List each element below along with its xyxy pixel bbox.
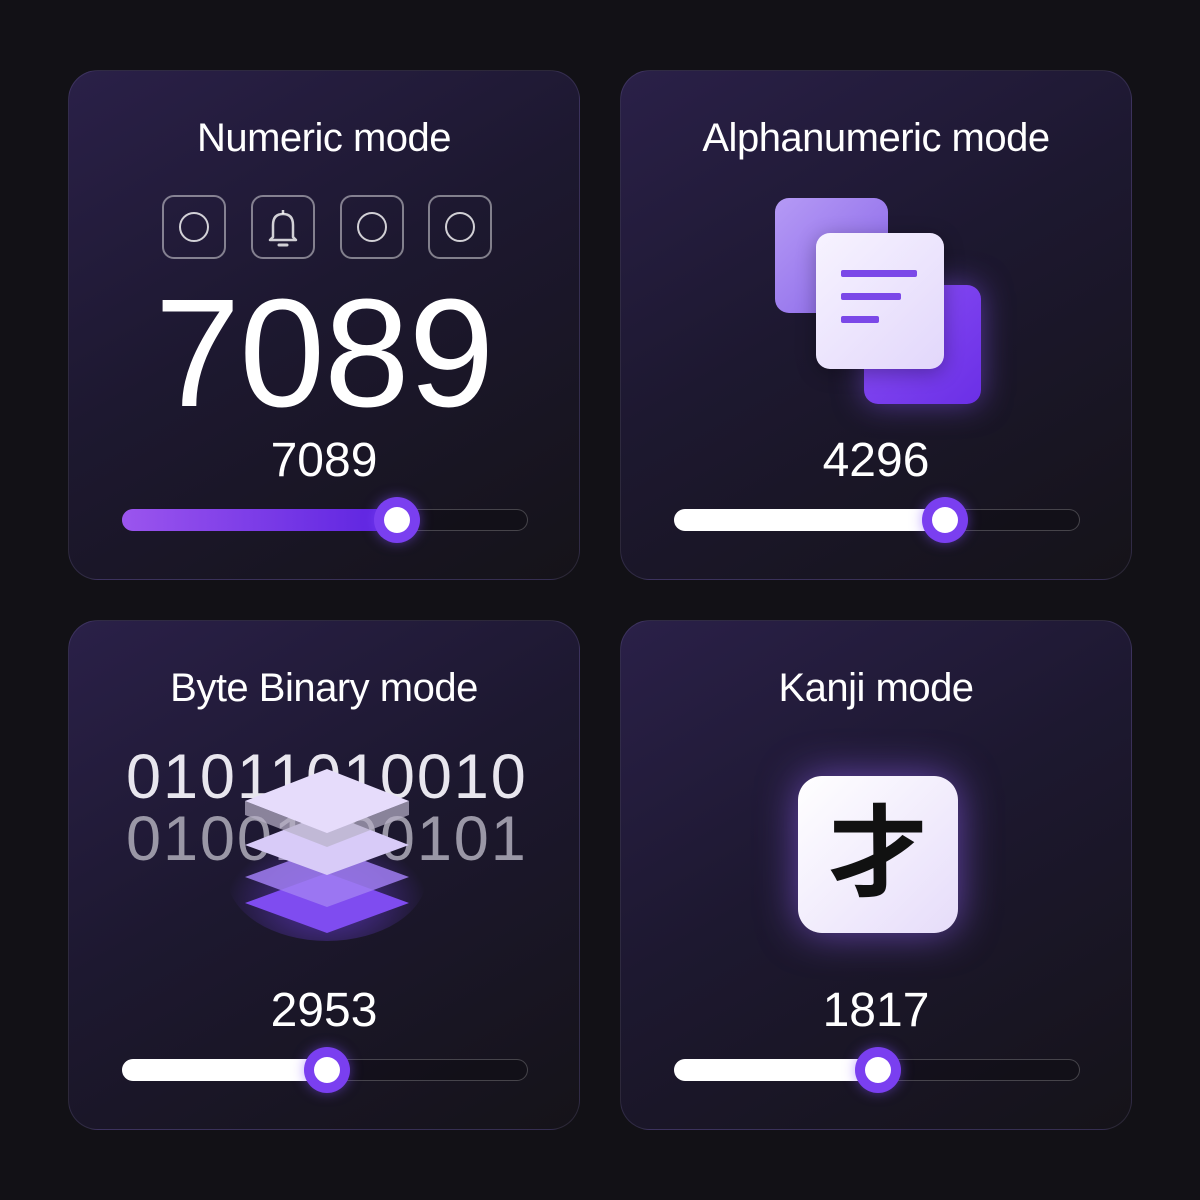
- value label: 7089: [271, 434, 377, 487]
- panel: byte binary mode: [68, 620, 580, 1130]
- value label: 1817: [823, 984, 929, 1037]
- title: byte binary mode: Byte Binary mode: [170, 666, 478, 710]
- panel: numeric mode: [68, 70, 580, 580]
- icon: documents: [775, 198, 1001, 424]
- icon: circle 3: [428, 195, 492, 259]
- icon: bell: [251, 195, 315, 259]
- slider: [674, 1059, 1080, 1081]
- slider: [122, 509, 528, 531]
- icon: kanji tile: 才: [828, 798, 928, 910]
- binary text: 01011010010: [126, 742, 528, 812]
- value label: 2953: [271, 984, 377, 1037]
- icon: layers: [234, 769, 420, 941]
- icon: circle 1: [162, 195, 226, 259]
- icon: kanji tile: [798, 776, 958, 933]
- binary text: 01001100101: [126, 804, 528, 874]
- binary text: [126, 742, 528, 874]
- panel: alphanumeric mode: [620, 70, 1132, 580]
- title: kanji mode: Kanji mode: [778, 666, 974, 710]
- panel: kanji mode: [620, 620, 1132, 1130]
- slider: [674, 509, 1080, 531]
- title: numeric mode: Numeric mode: [197, 116, 451, 160]
- big number: 7089: [155, 267, 493, 439]
- slider: [122, 1059, 528, 1081]
- icon row: [162, 195, 492, 259]
- title: alphanumeric mode: Alphanumeric mode: [702, 116, 1050, 160]
- icon: circle 2: [340, 195, 404, 259]
- value label: 4296: [823, 434, 929, 487]
